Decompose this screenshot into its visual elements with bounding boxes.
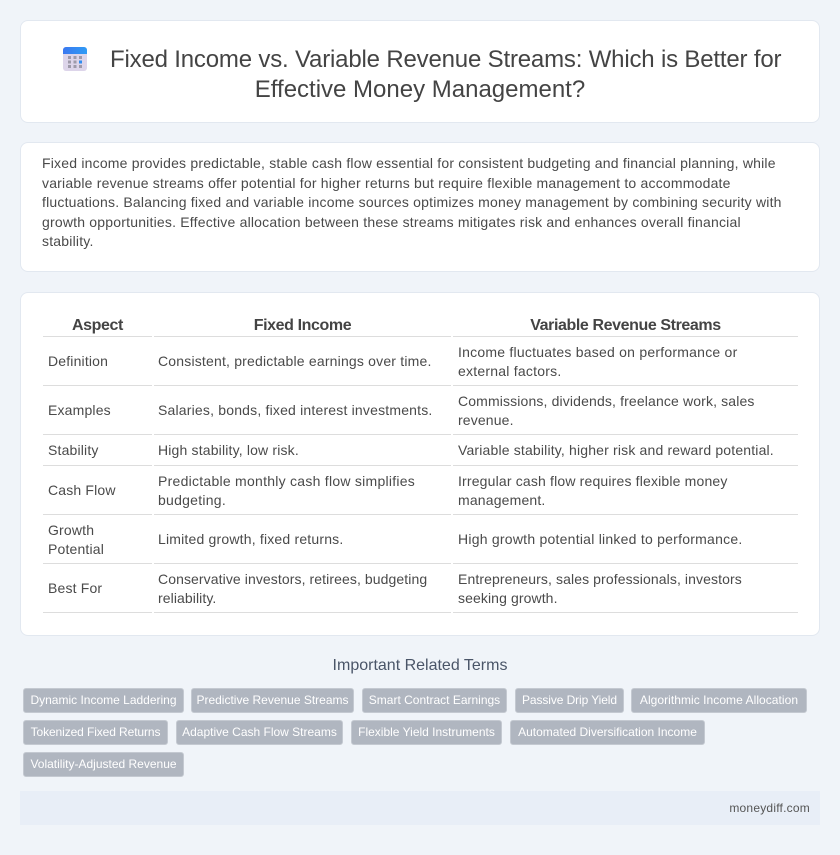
text: seeking growth. — [458, 590, 558, 606]
row: Definition: Definition — [48, 353, 108, 369]
summary text: variable revenue streams offer potential for higher returns but require flexible management to accommodate — [42, 175, 731, 191]
tag — [631, 688, 807, 713]
row: Stability: Stability — [48, 442, 99, 458]
tag — [515, 688, 624, 713]
title: Effective Money Management? — [255, 76, 585, 103]
tag — [351, 720, 502, 745]
text: Salaries, bonds, fixed interest investments. — [158, 402, 432, 418]
title: Fixed Income vs. Variable Revenue Streams: Which is Better for — [110, 46, 781, 73]
text: Entrepreneurs, sales professionals, investors — [458, 571, 742, 587]
table header: Aspect: Aspect — [72, 317, 123, 334]
tag: Algorithmic Income Allocation — [640, 693, 798, 707]
text: revenue. — [458, 412, 514, 428]
table header: Fixed Income: Fixed Income — [254, 317, 351, 334]
title — [110, 46, 782, 103]
row: Examples: Examples — [48, 402, 111, 418]
text: High growth potential linked to performance. — [458, 531, 742, 547]
text: Conservative investors, retirees, budgeting — [158, 571, 427, 587]
row: Growth Potential — [48, 522, 104, 557]
text: budgeting. — [158, 492, 226, 508]
text: reliability. — [158, 590, 216, 606]
tag — [176, 720, 343, 745]
summary text: Fixed income provides predictable, stable cash flow essential for consistent budgeting and financial planning, while — [42, 155, 776, 171]
tag: Smart Contract Earnings — [369, 693, 500, 707]
tag — [510, 720, 705, 745]
text: Consistent, predictable earnings over time. — [158, 353, 432, 369]
text: external factors. — [458, 363, 562, 379]
tag: Passive Drip Yield — [522, 693, 617, 707]
text: Limited growth, fixed returns. — [158, 531, 343, 547]
text: Variable stability, higher risk and reward potential. — [458, 442, 774, 458]
table header: Variable Revenue Streams: Variable Revenue Streams — [530, 317, 721, 334]
row: Growth Potential: Potential — [48, 541, 104, 557]
summary text: growth opportunities. Effective allocation between these streams mitigates risk and enhances overall financial — [42, 214, 741, 230]
heading: Important Related Terms: Important Related Terms — [333, 657, 507, 674]
tag: Predictive Revenue Streams — [196, 693, 349, 707]
summary text: stability. — [42, 233, 94, 249]
tag — [23, 688, 184, 713]
tag: Flexible Yield Instruments — [358, 725, 495, 739]
footer bar — [20, 791, 820, 825]
footer text: moneydiff.com — [729, 801, 810, 815]
tag — [23, 752, 184, 777]
text: High stability, low risk. — [158, 442, 299, 458]
row: Best For: Best For — [48, 580, 102, 596]
tag: Tokenized Fixed Returns — [31, 725, 160, 739]
text: Commissions, dividends, freelance work, sales — [458, 393, 755, 409]
text: management. — [458, 492, 545, 508]
tag — [362, 688, 507, 713]
summary text — [42, 155, 782, 249]
text: Income fluctuates based on performance or — [458, 344, 737, 360]
row: Cash Flow: Cash Flow — [48, 482, 116, 498]
summary text: fluctuations. Balancing fixed and variable income sources optimizes money management by combining security with — [42, 194, 782, 210]
tag — [191, 688, 354, 713]
tag: Dynamic Income Laddering — [30, 693, 177, 707]
panel: title header — [20, 20, 820, 123]
tag: Volatility-Adjusted Revenue — [30, 757, 177, 771]
text: Predictable monthly cash flow simplifies — [158, 473, 415, 489]
tag: Automated Diversification Income — [518, 725, 697, 739]
row: Growth Potential: Growth — [48, 522, 94, 538]
icon: calendar — [63, 47, 87, 71]
text: Irregular cash flow requires flexible money — [458, 473, 728, 489]
panel: summary paragraph — [20, 142, 820, 272]
panel: comparison table — [20, 292, 820, 636]
tags: related terms — [23, 688, 807, 777]
tag: Adaptive Cash Flow Streams — [182, 725, 337, 739]
tag — [23, 720, 168, 745]
